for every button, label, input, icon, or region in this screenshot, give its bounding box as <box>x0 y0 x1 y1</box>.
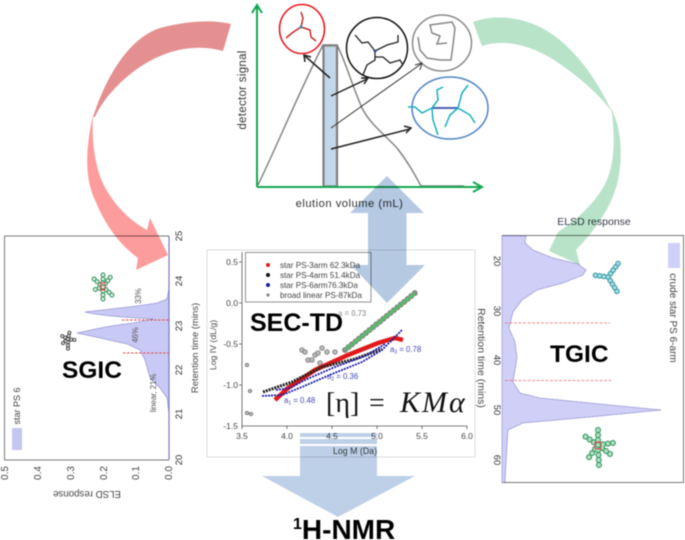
icon: black 4-arm star <box>346 18 408 78</box>
icon: green 6-arm star <box>583 427 614 466</box>
response tick labels <box>0 466 175 480</box>
equation: [η] <box>326 388 359 419</box>
panel border <box>207 250 475 457</box>
slope labels: a <box>390 345 394 354</box>
label: SGIC: SGIC <box>62 357 122 384</box>
arrow tail <box>473 17 612 112</box>
legend: broad linear PS-87kDa <box>280 291 362 300</box>
icon: green 6-arm star <box>93 271 113 303</box>
plot frame <box>4 236 169 460</box>
label: SEC-TD: SEC-TD <box>250 309 343 337</box>
x tick labels <box>236 431 473 441</box>
y tick labels: 0.0 <box>226 298 238 308</box>
x tick labels: 6.0 <box>461 431 473 441</box>
response tick labels: 0.4 <box>33 466 44 480</box>
filled peaks <box>502 236 661 483</box>
slope labels: 3 <box>394 350 397 356</box>
retention tick labels <box>174 231 185 465</box>
fraction markers <box>505 323 613 380</box>
retention tick labels: 20 <box>491 256 502 266</box>
retention tick labels: 21 <box>174 409 185 419</box>
icon: gray collapsed polymer <box>412 15 472 71</box>
peak labels: 46% <box>131 327 140 343</box>
slope labels: = 0.48 <box>291 396 315 405</box>
icon: teal 3-arm star <box>593 261 620 293</box>
response tick labels: 0.1 <box>131 466 142 480</box>
response tick labels: 0.3 <box>66 466 77 480</box>
x tick labels: 3.5 <box>236 431 248 441</box>
axis label: detector signal: detector signal <box>237 50 249 130</box>
retention tick labels: 50 <box>491 405 502 415</box>
right axis <box>168 236 170 460</box>
arrow: to gray polymer <box>331 63 422 128</box>
legend text: star PS 6 <box>12 387 22 425</box>
arrow: blue double-headed <box>350 176 425 303</box>
arrow head <box>549 108 621 265</box>
arrow: to red star <box>304 55 330 78</box>
legend swatch <box>668 243 680 268</box>
x tick labels: 4.5 <box>326 431 338 441</box>
label: 1H-NMR: 1 <box>293 516 302 533</box>
peak labels: 33% <box>134 288 143 304</box>
equation <box>326 386 467 419</box>
legend swatch <box>12 428 22 450</box>
legend: star PS-3arm 62.3kDa <box>280 261 361 270</box>
scatter: star PS-6arm <box>262 330 402 396</box>
axis label: retention time: Retention time (mins) <box>475 308 487 408</box>
label: TGIC: TGIC <box>550 341 609 368</box>
retention tick labels: 22 <box>174 365 185 375</box>
y tick labels: -1.0 <box>223 380 238 390</box>
y tick labels <box>223 257 238 431</box>
retention tick labels: 60 <box>491 455 502 465</box>
arrow: red, SEC to SGIC <box>87 21 231 270</box>
slope labels: 2 <box>331 376 334 382</box>
y tick labels: -0.5 <box>223 339 238 349</box>
panel: SEC-TD Mark-Houwink plot <box>207 250 475 457</box>
y tick labels: 0.5 <box>226 257 238 267</box>
legend <box>246 252 371 302</box>
scatter: star PS-3arm <box>275 338 403 400</box>
response tick labels: 0.0 <box>164 466 175 480</box>
retention tick labels: 40 <box>491 355 502 365</box>
retention tick labels: 24 <box>174 276 185 286</box>
x tick labels: 5.5 <box>416 431 428 441</box>
retention tick labels: 20 <box>174 455 185 465</box>
panel: SGIC chromatogram <box>0 231 201 499</box>
arrow head <box>87 115 168 270</box>
axis label: retention time: Retention time (mins) <box>190 303 201 393</box>
axis label: elution volume: elution volume (mL) <box>296 198 403 210</box>
fraction bar <box>324 46 337 186</box>
panel: SEC detector chart <box>237 4 488 210</box>
panel: TGIC chromatogram <box>475 216 684 483</box>
axis label: ELSD response: ELSD response <box>53 488 121 499</box>
slope labels: = 0.78 <box>397 345 421 354</box>
retention tick labels: 23 <box>174 321 185 331</box>
icon: gray 4-arm star <box>60 330 75 350</box>
plot frame <box>502 236 684 482</box>
slope labels: a <box>327 372 331 381</box>
legend text: crude star PS 6-arm <box>667 273 678 363</box>
arrow: to black star <box>331 78 368 96</box>
fraction markers <box>122 320 169 353</box>
equation: KMα <box>399 386 467 419</box>
icon: red 3-arm star <box>280 4 324 54</box>
scatter: star PS-4arm <box>263 349 382 392</box>
axis label: log M: Log M (Da) <box>333 446 377 456</box>
arrow: blue down to NMR <box>262 433 415 517</box>
axis label: ELSD response: ELSD response <box>557 216 631 228</box>
response tick labels: 0.5 <box>0 466 11 480</box>
arrow tail <box>93 21 231 117</box>
slope labels: = 0.36 <box>334 372 358 381</box>
curve: detector signal <box>258 45 464 186</box>
peak labels <box>131 288 158 412</box>
slope labels: 1 <box>288 400 291 406</box>
slope labels: a = 0.73 <box>338 309 367 318</box>
icon: blue coupled star <box>408 77 488 139</box>
equation: = <box>369 388 385 419</box>
y tick labels: -1.5 <box>223 421 238 431</box>
axes <box>252 5 482 192</box>
legend: star PS-6arm76.3kDa <box>280 281 358 290</box>
plot axes <box>242 252 467 426</box>
retention tick labels: 30 <box>491 306 502 316</box>
slope labels: a <box>284 396 288 405</box>
retention tick labels <box>491 256 502 465</box>
peak labels: linear, 21% <box>149 374 158 412</box>
arrow: to blue star <box>331 126 411 149</box>
x tick labels: 5.0 <box>371 431 383 441</box>
legend: star PS-4arm 51.4kDa <box>280 271 361 280</box>
ticks <box>239 262 467 429</box>
scatter: broad linear PS <box>245 293 415 416</box>
slope labels <box>284 309 421 406</box>
x tick labels: 4.0 <box>281 431 293 441</box>
axis label: log IV: Log IV (dL/g) <box>208 320 218 370</box>
filled peaks <box>77 288 169 414</box>
response tick labels: 0.2 <box>99 466 110 480</box>
arrow: green, SEC to TGIC <box>473 17 621 265</box>
retention tick labels: 25 <box>174 231 185 241</box>
